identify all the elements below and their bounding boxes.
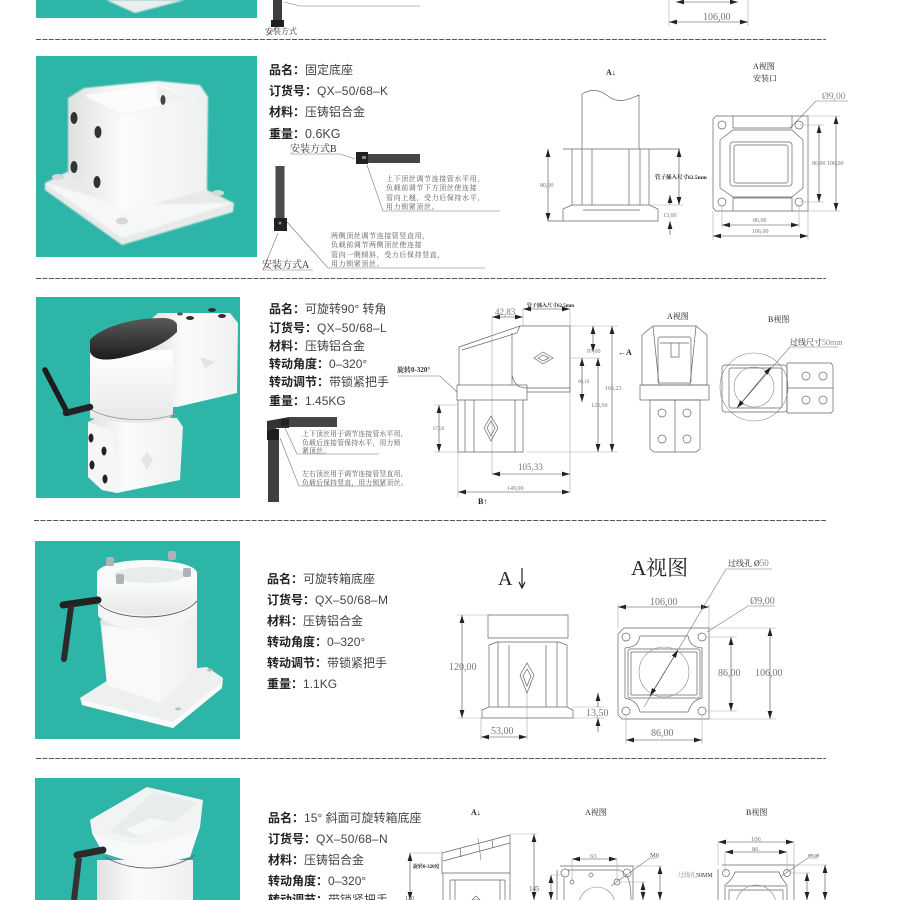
drawing: A view: Ø9,00: [822, 92, 846, 102]
drawing: A view: 106,00: [650, 597, 678, 608]
divider: [34, 520, 826, 522]
drawing: B view: B视图: [746, 808, 767, 817]
installation diagram: 左右顶丝用于调节连接管竖直用，: [302, 469, 408, 479]
drawing: A view: [618, 556, 782, 744]
installation diagram B: 管向上翘，受力后保持水平，: [386, 193, 485, 203]
divider: [36, 38, 826, 40]
installation diagram: 上下顶丝用于调节连接管水平用，: [302, 429, 408, 439]
specifications: 品名：15° 斜面可旋转箱底座: [268, 810, 422, 825]
drawing: A view: A视图: [631, 556, 688, 580]
installation diagram B: 负载前调节下方顶丝使连接: [386, 183, 477, 192]
drawing: front elevation: 53,00: [491, 726, 514, 737]
installation diagram A: 两侧顶丝调节连接管竖直用，: [331, 231, 430, 241]
specifications: [269, 62, 388, 141]
drawing: A view: A视图: [753, 62, 775, 71]
installation diagram B: 上下顶丝调节连接管水平用，: [386, 174, 485, 184]
installation diagram A: 管向一侧倾斜，受力后保持竖直，: [331, 250, 445, 260]
specifications: 订货号：QX–50/68–N: [268, 831, 388, 846]
specifications: 材料：压铸铝合金: [267, 613, 363, 628]
specifications: [269, 301, 389, 408]
drawing: front elevation: 旋转0-320度: [413, 863, 440, 870]
specifications: 材料：压铸铝合金: [268, 852, 364, 867]
product photo: rotating corner: [36, 297, 240, 498]
drawing: front elevation: 管子插入尺寸62.5mm: [655, 173, 707, 181]
specifications: 品名：可旋转箱底座: [267, 571, 375, 586]
drawing: A view: 63: [590, 853, 596, 860]
specifications: [268, 810, 422, 900]
installation diagram B: [290, 142, 500, 211]
drawing: B view: Ø9,00: [808, 853, 820, 859]
specifications: 转动角度：0–320°: [267, 634, 365, 649]
drawing: A view: 86,00: [651, 728, 674, 739]
drawing: side elevation: 149,00: [507, 486, 524, 492]
drawing: B view: 106: [751, 836, 762, 843]
drawing: side elevation: 67,50: [433, 427, 445, 432]
drawing: A view: A视图: [585, 808, 607, 817]
specifications: 转动调节：带锁紧把手: [269, 374, 389, 389]
drawing: side elevation: 管子插入尺寸62.5mm: [527, 302, 575, 309]
installation diagram A: 用力锁紧顶丝。: [331, 259, 384, 268]
dimension fragment: [669, 0, 748, 26]
section: tilted rotating base QX-50/68-N: [35, 778, 827, 900]
installation diagram A: 安装方式A: [262, 258, 310, 271]
specifications: 品名：可旋转90° 转角: [269, 301, 386, 316]
specifications: 重量：1.45KG: [269, 393, 346, 408]
drawing: front elevation: [449, 568, 608, 740]
divider: [36, 758, 826, 760]
product photo fragment: [36, 0, 257, 18]
drawing: A view: [551, 808, 662, 900]
drawing: A view: [640, 312, 709, 452]
drawing: A view: 86,00 106,00: [812, 161, 844, 167]
divider: [36, 278, 826, 280]
specifications: 材料：压铸铝合金: [269, 338, 365, 353]
installation diagram: 紧顶丝。: [302, 446, 330, 455]
drawing: side elevation: [397, 302, 632, 506]
dimension fragment: 106,00: [703, 12, 730, 23]
installation pipe fragment: [267, 0, 420, 36]
drawing: front elevation: 13,50: [586, 708, 608, 719]
drawing: B view: 过线孔50MM: [678, 871, 713, 879]
specifications: 订货号：QX–50/68–L: [269, 320, 387, 335]
specifications: 品名：固定底座: [269, 62, 353, 77]
installation diagram A: 负载前调节两侧顶丝使连接: [331, 240, 422, 249]
product photo: tilted rotating base: [35, 778, 240, 900]
drawing: side elevation: 42,83: [495, 307, 516, 317]
drawing: A view: [713, 62, 848, 240]
drawing: A view: 106,00: [752, 229, 768, 235]
specifications: 转动角度：0–320°: [268, 873, 366, 888]
installation diagram A: [262, 166, 485, 271]
drawing: front elevation: [540, 68, 707, 235]
specifications: 订货号：QX–50/68–M: [267, 592, 388, 607]
drawing: A view: 安装口: [753, 73, 777, 83]
drawing: A view: 过线孔 Ø50: [728, 558, 769, 568]
drawing: side elevation: 97,00: [587, 349, 600, 355]
installation diagram B: 用力锁紧顶丝。: [386, 202, 439, 211]
drawing: A view: 106,00: [755, 668, 782, 679]
specifications: 重量：1.1KG: [267, 676, 337, 691]
section: fixed base QX-50/68-K: [36, 56, 848, 271]
product photo: fixed base: [36, 56, 257, 257]
drawing: side elevation: 60,10: [578, 380, 590, 385]
installation label: 安装方式: [265, 26, 297, 36]
installation diagram B: 安装方式B: [290, 142, 337, 155]
drawing: A view: A视图: [667, 312, 689, 321]
section: previous product fragment: [36, 0, 748, 36]
drawing: side elevation: 旋转0-320°: [397, 365, 430, 374]
drawing: B view: 过线尺寸50mm: [790, 337, 843, 347]
drawing: B view: [678, 808, 827, 900]
drawing: B view: 86: [752, 846, 759, 853]
product photo: rotating base: [35, 541, 240, 739]
drawing: front elevation: 120,00: [449, 662, 476, 673]
drawing: front elevation: A↓: [606, 68, 616, 77]
specifications: [267, 571, 388, 691]
installation diagram: [267, 417, 408, 502]
drawing: B view: B视图: [768, 315, 789, 324]
drawing: side elevation: B↑: [478, 497, 487, 506]
drawing: front elevation: [405, 808, 540, 900]
specifications: 重量：0.6KG: [269, 126, 340, 141]
specifications: 订货号：QX–50/68–K: [269, 83, 388, 98]
drawing: side elevation: ←A: [618, 348, 632, 357]
drawing: A view: M6: [650, 852, 660, 859]
section: rotating corner QX-50/68-L: [36, 297, 843, 506]
specifications: 转动调节：带锁紧把手: [267, 655, 387, 670]
drawing: front elevation: 80,00: [540, 183, 554, 189]
drawing: A view: 86,00: [753, 218, 766, 224]
drawing: side elevation: 166,23: [605, 386, 622, 392]
drawing: front elevation: 145: [529, 885, 540, 893]
drawing: A view: 86,00: [718, 668, 740, 679]
drawing: B view: [720, 315, 843, 421]
drawing: front elevation: A: [498, 568, 513, 590]
drawing: side elevation: 122,60: [591, 403, 608, 409]
drawing: A view: Ø9,00: [750, 596, 775, 607]
drawing: front elevation: A↓: [471, 808, 481, 817]
drawing: front elevation: 13,00: [663, 213, 676, 219]
specifications: 材料：压铸铝合金: [269, 104, 365, 119]
installation diagram: 负载后保持竖直，用力锁紧顶丝。: [302, 478, 408, 488]
drawing: side elevation: 105,33: [518, 462, 543, 472]
installation diagram: 负载后连接管保持水平，用力锁: [302, 438, 401, 448]
specifications: 转动角度：0–320°: [269, 356, 367, 371]
section: rotating base QX-50/68-M: [35, 541, 782, 744]
